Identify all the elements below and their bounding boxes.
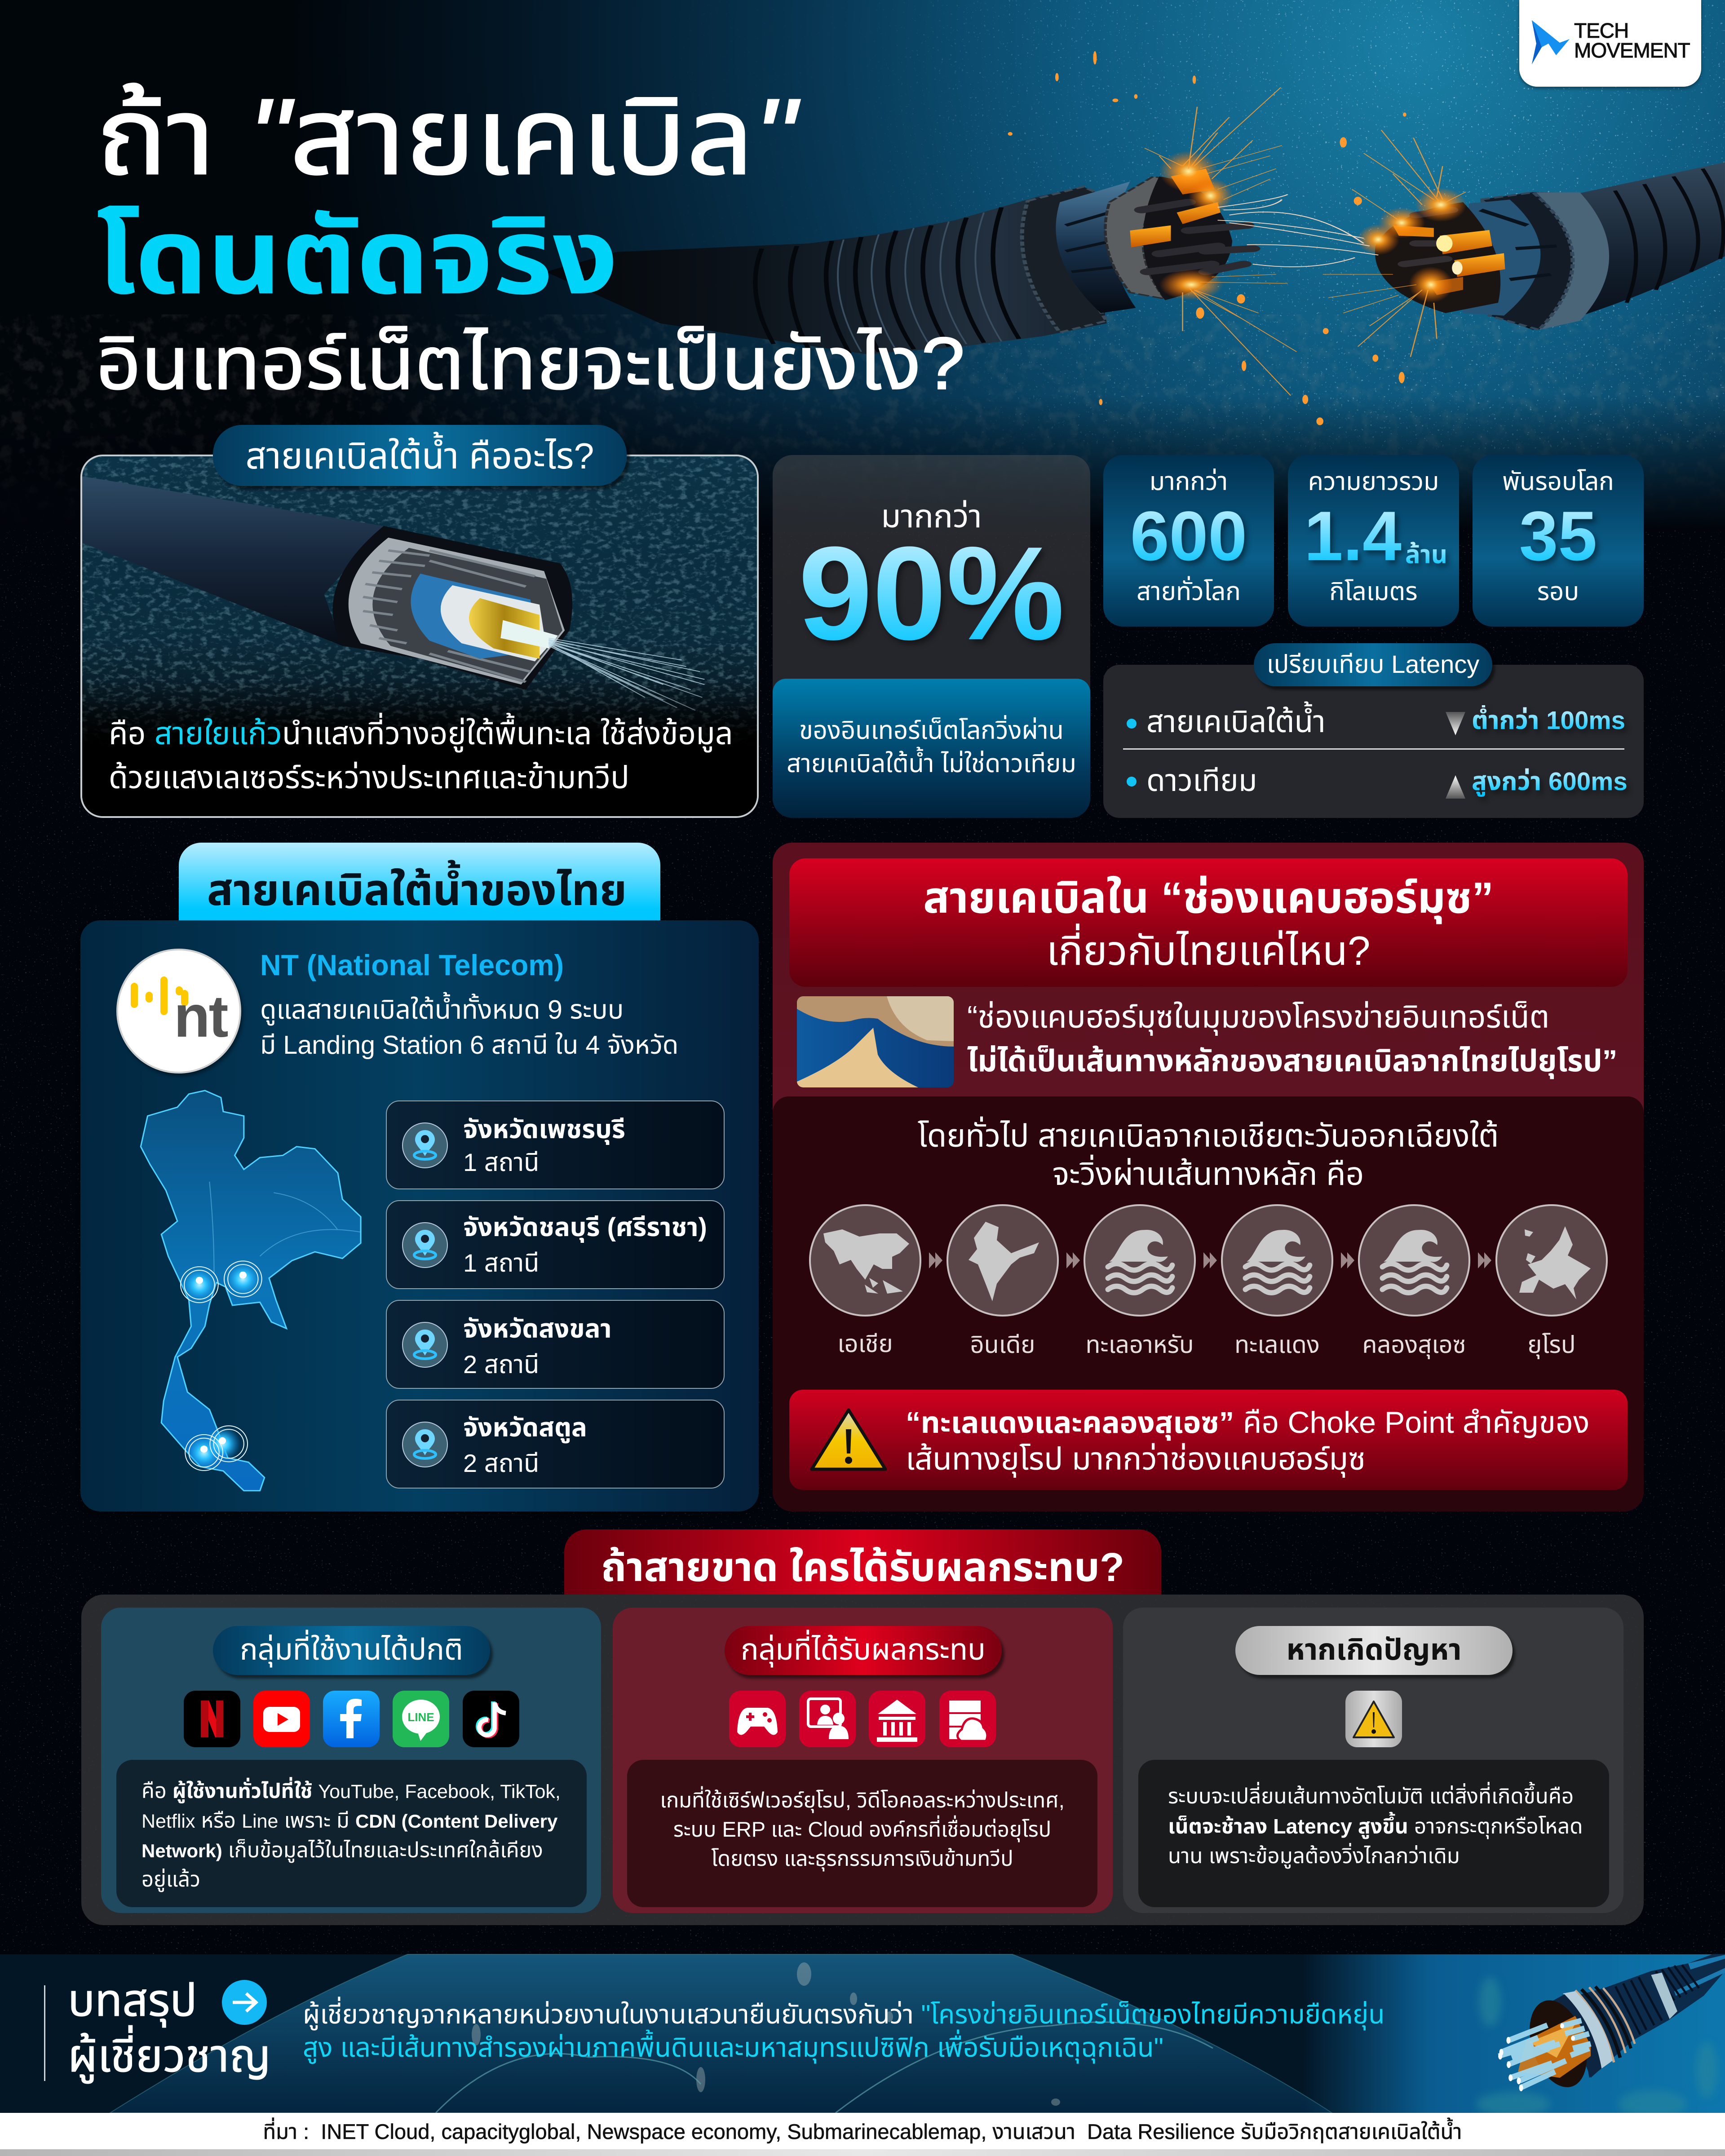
- panel: latency comparison: [1103, 665, 1644, 818]
- quote text: [967, 995, 1617, 1083]
- bottom strip: [0, 2149, 1725, 2156]
- row: satellite: ดาวเทียม: [1146, 764, 1257, 798]
- more than label: มากกว่า: [881, 499, 982, 535]
- pill: affected groups: [725, 1626, 1002, 1675]
- pill: normal users: [213, 1626, 490, 1675]
- conclusion text: สูง และมีเส้นทางสำรองผ่านภาคพื้นดินและมหาสมุทรแปซิฟิก เพื่อรับมือเหตุฉุกเฉิน": [303, 2032, 1163, 2063]
- route heading: จะวิ่งผ่านเส้นทางหลัก คือ: [1053, 1156, 1364, 1192]
- icon: LINE: [393, 1691, 449, 1747]
- text box: normal users: Network) เก็บข้อมูลไว้ในไทยและประเทศใกล้เคียง: [142, 1838, 543, 1862]
- icon: warning: [810, 1408, 887, 1471]
- route labels: ทะเลแดง: [1234, 1331, 1320, 1358]
- callout text: [906, 1404, 1590, 1477]
- logo: Tech Movement: MOVEMENT: [1574, 39, 1690, 62]
- cable: severed undersea cable: [546, 162, 1725, 354]
- route labels: เอเชีย: [837, 1330, 893, 1357]
- row: submarine cable: ต่ำกว่า 100ms: [1472, 706, 1625, 734]
- title: [90, 67, 1033, 409]
- logo: nt: nt: [174, 983, 227, 1049]
- description text: [109, 711, 756, 800]
- stat card: 35 laps: พันรอบโลก: [1502, 467, 1614, 495]
- quote text: ไม่ได้เป็นเส้นทางหลักของสายเคเบิลจากไทยไปยุโรป”: [967, 1044, 1617, 1078]
- icon: game controller: [729, 1691, 786, 1747]
- route step: India: [947, 1204, 1059, 1317]
- icon: Facebook: [323, 1691, 380, 1747]
- route step: Red Sea: [1221, 1204, 1333, 1317]
- icon: video call: [799, 1691, 856, 1747]
- source footer: ที่มา : INET Cloud, capacityglobal, Newspace economy, Submarinecablemap, งานเสวนา Data Resilience รับมือวิกฤตสายเคเบิลใต้น้ำ: [263, 2120, 1462, 2143]
- source footer: [0, 2113, 1725, 2149]
- divider: [1123, 748, 1624, 750]
- location: Phetchaburi: จังหวัดเพชรบุรี: [463, 1115, 625, 1144]
- callout text: เส้นทางยุโรป มากกว่าช่องแคบฮอร์มุซ: [906, 1441, 1366, 1476]
- heading: Hormuz: [789, 858, 1628, 987]
- heading tab: who is affected: [564, 1529, 1161, 1595]
- pill: normal users: กลุ่มที่ใช้งานได้ปกติ: [240, 1633, 463, 1666]
- location: Chonburi: 1 สถานี: [463, 1249, 540, 1277]
- heading tab: who is affected: ถ้าสายขาด ใครได้รับผลกระทบ?: [601, 1545, 1124, 1590]
- arrow: [929, 1252, 944, 1268]
- 90 percent caption: [773, 679, 1090, 818]
- stat card: 600 cables: สายทั่วโลก: [1137, 577, 1241, 605]
- text box: if problem: [1138, 1760, 1609, 1907]
- panel: Hormuz strait: [773, 843, 1644, 1511]
- heading pill: compare latency: เปรียบเทียบ Latency: [1267, 650, 1479, 678]
- icon: warning small: [1345, 1691, 1402, 1747]
- route labels: [793, 1325, 1624, 1365]
- conclusion label: [44, 1985, 233, 2081]
- pill: if problem: [1235, 1626, 1513, 1675]
- image: Hormuz satellite: [797, 996, 954, 1087]
- NT description: ดูแลสายเคเบิลใต้น้ำทั้งหมด 9 ระบบ: [260, 995, 624, 1025]
- text box: normal users: อยู่แล้ว: [142, 1867, 200, 1891]
- stat card: 1.4 million km: [1288, 455, 1459, 627]
- stat card: 1.4 million km: 1.4: [1304, 497, 1402, 575]
- panel: Thailand cables: [80, 920, 759, 1511]
- text box: normal users: คือ ผู้ใช้งานทั่วไปที่ใช้ YouTube, Facebook, TikTok,: [142, 1779, 561, 1803]
- route step: Arabian Sea: [1084, 1204, 1196, 1317]
- NT title: NT (National Telecom): [260, 949, 564, 981]
- column: unaffected: [101, 1608, 601, 1913]
- text box: normal users: [116, 1760, 587, 1907]
- conclusion label: ผู้เชี่ยวชาญ: [68, 2030, 271, 2081]
- location: Phetchaburi: [386, 1100, 725, 1189]
- location: Chonburi: จังหวัดชลบุรี (ศรีราชา): [463, 1213, 707, 1242]
- conclusion text: ผู้เชี่ยวชาญจากหลายหน่วยงานในงานเสวนายืนยันตรงกันว่า "โครงข่ายอินเทอร์เน็ตของไทยมีความยืดหยุ่น: [303, 1999, 1385, 2029]
- location: Songkhla: จังหวัดสงขลา: [463, 1314, 612, 1343]
- text box: if problem: เน็ตจะช้าลง Latency สูงขึ้น อาจกระตุกหรือโหลด: [1168, 1815, 1583, 1838]
- route labels: ยุโรป: [1527, 1331, 1576, 1358]
- heading tab: Thai cables: [179, 843, 660, 920]
- icon: LINE: LINE: [407, 1710, 434, 1724]
- arrow: [1203, 1252, 1219, 1268]
- logo: nt: [116, 949, 241, 1074]
- big number: 90%: [798, 519, 1065, 667]
- location: Satun: [386, 1400, 725, 1489]
- row: submarine cable: [1103, 696, 1644, 750]
- sub-panel: route background: [773, 1096, 1644, 1511]
- description text: คือ สายใยแก้วนำแสงที่วางอยู่ใต้พื้นทะเล ใช้ส่งข้อมูล: [109, 716, 733, 751]
- panel: 90 percent stat: [773, 455, 1090, 818]
- text box: if problem: นาน เพราะข้อมูลต้องวิ่งไกลกว่าเดิม: [1168, 1844, 1460, 1868]
- text box: normal users: Netflix หรือ Line เพราะ มี CDN (Content Delivery: [142, 1808, 557, 1832]
- route step: Europe: [1495, 1204, 1608, 1317]
- column: affected: [613, 1608, 1113, 1913]
- NT description: [260, 992, 678, 1063]
- map: Thailand with landing stations: [135, 1087, 368, 1496]
- stat card: 1.4 million km: ล้าน: [1405, 540, 1447, 569]
- conclusion text: [303, 1998, 1385, 2064]
- icon: bank: [869, 1691, 925, 1747]
- icon: TikTok: [463, 1691, 519, 1747]
- arrow: [1066, 1252, 1082, 1268]
- description text: ด้วยแสงเลเซอร์ระหว่างประเทศและข้ามทวีป: [109, 760, 629, 795]
- route step: Asia: [809, 1204, 921, 1317]
- location: Phetchaburi: 1 สถานี: [463, 1148, 540, 1176]
- panel: impact groups: [81, 1595, 1644, 1925]
- text box: affected: เกมที่ใช้เซิร์ฟเวอร์ยุโรป, วิดีโอคอลระหว่างประเทศ,: [660, 1788, 1065, 1812]
- 90 percent caption: สายเคเบิลใต้น้ำ ไม่ใช่ดาวเทียม: [787, 749, 1076, 778]
- text box: affected: โดยตรง และธุรกรรมการเงินข้ามทวีป: [711, 1847, 1013, 1870]
- route labels: อินเดีย: [970, 1331, 1035, 1358]
- route labels: ทะเลอาหรับ: [1086, 1331, 1194, 1358]
- heading tab: Thai cables: สายเคเบิลใต้น้ำของไทย: [207, 866, 627, 915]
- conclusion banner: [0, 1954, 1725, 2113]
- 90 percent caption: ของอินเทอร์เน็ตโลกวิ่งผ่าน: [799, 716, 1064, 744]
- text box: if problem: ระบบจะเปลี่ยนเส้นทางอัตโนมัติ แต่สิ่งที่เกิดขึ้นคือ: [1168, 1785, 1574, 1808]
- column: if problem occurs: [1123, 1608, 1623, 1913]
- arrow: [1478, 1252, 1493, 1268]
- NT description: มี Landing Station 6 สถานี ใน 4 จังหวัด: [260, 1031, 678, 1060]
- pill: affected groups: กลุ่มที่ได้รับผลกระทบ: [741, 1633, 986, 1666]
- banner background: globe and fibre cable: [0, 1954, 1725, 2118]
- logo: Tech Movement: TECH: [1574, 19, 1628, 42]
- heading pill: what is: [213, 425, 627, 486]
- callout: choke point: [789, 1390, 1628, 1490]
- row: satellite: [1103, 755, 1644, 808]
- heading pill: compare latency: [1254, 643, 1492, 686]
- illustration: cable cross-section: [80, 455, 759, 818]
- row: submarine cable: สายเคเบิลใต้น้ำ: [1146, 705, 1326, 739]
- sparks: orange glow and sparks at cut: [1008, 51, 1467, 425]
- stat card: 600 cables: [1103, 455, 1274, 627]
- title line 1: ถ้า "สายเคเบิล": [96, 76, 796, 197]
- logo: Tech Movement: [1519, 0, 1701, 87]
- heading pill: what is: สายเคเบิลใต้น้ำ คืออะไร?: [245, 436, 594, 477]
- stat card: 35 laps: 35: [1519, 497, 1597, 575]
- row: satellite: สูงกว่า 600ms: [1472, 767, 1628, 795]
- location: Satun: 2 สถานี: [463, 1449, 540, 1477]
- conclusion label: บทสรุป: [68, 1975, 197, 2026]
- stat card: 600 cables: 600: [1130, 497, 1247, 575]
- heading: Hormuz: สายเคเบิลใน “ช่องแคบฮอร์มุซ”: [923, 873, 1494, 922]
- heading: Hormuz: เกี่ยวกับไทยแค่ไหน?: [1046, 928, 1371, 974]
- stat card: 1.4 million km: กิโลเมตร: [1329, 577, 1418, 605]
- stat card: 35 laps: รอบ: [1537, 577, 1579, 605]
- arrow: [1341, 1252, 1356, 1268]
- text box: affected: [627, 1760, 1097, 1907]
- panel: what is submarine cable: [80, 455, 759, 818]
- stat card: 35 laps: [1473, 455, 1644, 627]
- icon: server cloud: [939, 1691, 996, 1747]
- stat card: 1.4 million km: ความยาวรวม: [1308, 467, 1439, 495]
- pill: if problem: หากเกิดปัญหา: [1287, 1633, 1462, 1666]
- icon: arrow: [222, 1980, 267, 2025]
- location: Songkhla: [386, 1300, 725, 1389]
- title line 3: อินเทอร์เน็ตไทยจะเป็นยังไง?: [96, 322, 965, 405]
- text box: affected: ระบบ ERP และ Cloud องค์กรที่เชื่อมต่อยุโรป: [673, 1817, 1051, 1841]
- icon: Netflix: [184, 1691, 240, 1747]
- quote text: “ช่องแคบฮอร์มุซในมุมของโครงข่ายอินเทอร์เน็ต: [967, 999, 1549, 1034]
- route labels: คลองสุเอซ: [1362, 1331, 1466, 1358]
- icon: YouTube: [253, 1691, 310, 1747]
- route heading: โดยทั่วไป สายเคเบิลจากเอเชียตะวันออกเฉียงใต้: [918, 1118, 1499, 1153]
- route step: Suez Canal: [1358, 1204, 1470, 1317]
- location: Songkhla: 2 สถานี: [463, 1350, 540, 1378]
- location: Satun: จังหวัดสตูล: [463, 1413, 587, 1442]
- stat card: 600 cables: มากกว่า: [1150, 467, 1228, 495]
- location: Chonburi: [386, 1200, 725, 1289]
- callout text: “ทะเลแดงและคลองสุเอซ” คือ Choke Point สำคัญของ: [906, 1405, 1590, 1440]
- title line 2: โดนตัดจริง: [96, 198, 618, 316]
- route heading: [773, 1117, 1644, 1193]
